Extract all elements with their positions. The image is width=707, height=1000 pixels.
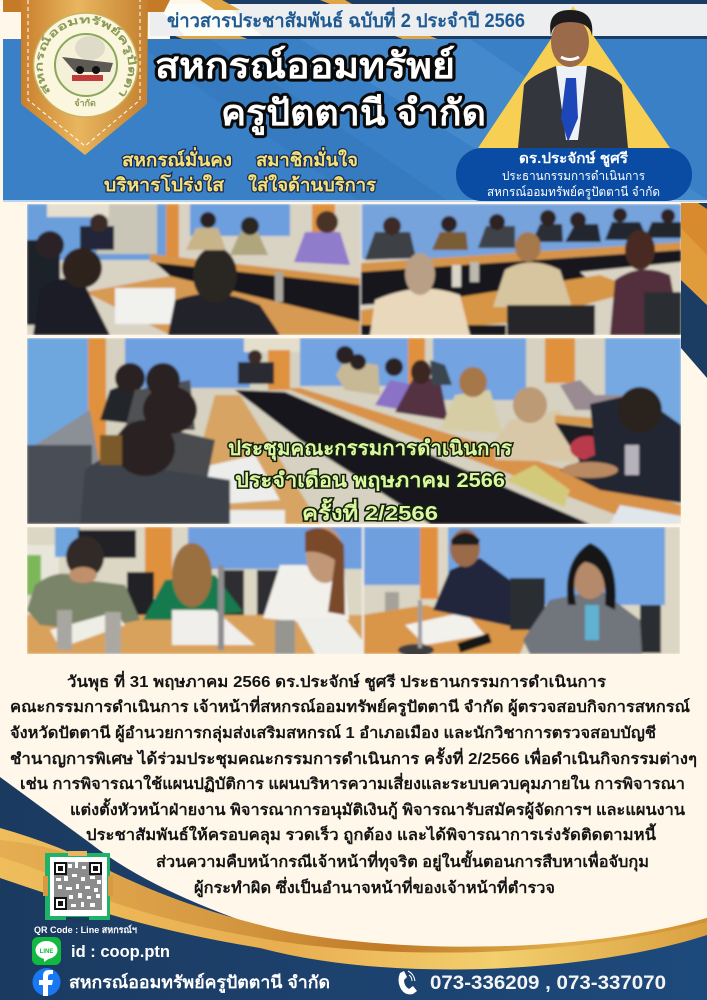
footer swoosh [0,777,707,1000]
icon: ribbon with cooperative seal: จำกัด [74,98,96,108]
heading: cooperative name [155,45,486,136]
body paragraph: ชำนาญการพิเศษ ได้ร่วมประชุมคณะกรรมการดำเนินการ ครั้งที่ 2/2566 เพื่อดำเนินกิจกรรมต่างๆ [10,747,697,769]
name plate [456,148,692,201]
slogans: สมาชิกมั่นใจ [256,147,358,170]
header banner [3,0,707,202]
telephone numbers: 073-336209 , 073-337070 [430,973,666,994]
blue panel [3,39,707,202]
slogans: บริหารโปร่งใส [104,174,225,195]
newsletter title: ข่าวสารประชาสัมพันธ์ ฉบับที่ 2 ประจำปี 2566 [167,7,525,32]
name plate: ประธานกรรมการดำเนินการ [502,169,645,183]
LINE id: id : coop.ptn [71,942,170,961]
icon: telephone [398,971,417,994]
meeting caption: ประชุมคณะกรรมการดำเนินการ [228,438,512,461]
heading: cooperative name: ครูปัตตานี จำกัด [221,92,486,136]
yellow triangle behind chairman [478,6,670,148]
slogans: ใส่ใจด้านบริการ [248,174,376,195]
body paragraph: ผู้กระทำผิด ซึ่งเป็นอำนาจหน้าที่ของเจ้าหน้าที่ตำรวจ [194,876,555,899]
slogans: สหกรณ์มั่นคง [122,147,232,170]
body paragraph: คณะกรรมการดำเนินการ เจ้าหน้าที่สหกรณ์ออมทรัพย์ครูปัตตานี จำกัด ผู้ตรวจสอบกิจการสหกรณ์ [10,695,691,718]
body paragraph: เช่น การพิจารณาใช้แผนปฏิบัติการ แผนบริหารความเสี่ยงและระบบควบคุมภายใน การพิจารณา [20,772,685,794]
QR caption: QR Code : Line สหกรณ์ฯ [34,924,137,936]
body paragraph: ส่วนความคืบหน้ากรณีเจ้าหน้าที่ทุจริต อยู่ในขั้นตอนการสืบหาเพื่อจับกุม [156,850,649,873]
body paragraph [10,670,697,899]
top band [150,0,707,40]
Facebook page name: สหกรณ์ออมทรัพย์ครูปัตตานี จำกัด [69,972,330,994]
chairman portrait [518,10,628,148]
name plate: ดร.ประจักษ์ ชูศรี [519,150,629,167]
body paragraph: ประชาสัมพันธ์ให้ครอบคลุม รวดเร็ว ถูกต้อง และได้พิจารณาการเร่งรัดติดตามหนี้ [86,823,656,846]
icon: ribbon with cooperative seal [3,0,170,155]
photo row 3: close-up of attendees [27,527,680,656]
meeting caption [228,438,512,525]
body paragraph: แต่งตั้งหัวหน้าฝ่ายงาน พิจารณาการอนุมัติเงินกู้ พิจารณารับสมัครผู้จัดการฯ และแผนงาน [70,798,685,821]
icon: Facebook [32,968,60,996]
icon: LINE [32,937,61,965]
meeting caption: ประจำเดือน พฤษภาคม 2566 [235,469,505,492]
right edge decoration [681,203,707,378]
body paragraph: จังหวัดปัตตานี ผู้อำนวยการกลุ่มส่งเสริมสหกรณ์ 1 อำเภอเมือง และนักวิชาการตรวจสอบบัญชี [10,724,657,744]
icon: LINE: LINE [40,949,53,955]
body paragraph: วันพุธ ที่ 31 พฤษภาคม 2566 ดร.ประจักษ์ ชูศรี ประธานกรรมการดำเนินการ [67,670,607,693]
photo row 1: meeting tables [27,204,681,335]
photo row 2: long meeting table [27,338,681,525]
meeting caption: ครั้งที่ 2/2566 [302,498,438,525]
slogans [104,147,376,195]
name plate: สหกรณ์ออมทรัพย์ครูปัตตานี จำกัด [487,185,660,200]
icon: QR code [43,851,113,922]
heading: cooperative name: สหกรณ์ออมทรัพย์ [155,45,455,86]
